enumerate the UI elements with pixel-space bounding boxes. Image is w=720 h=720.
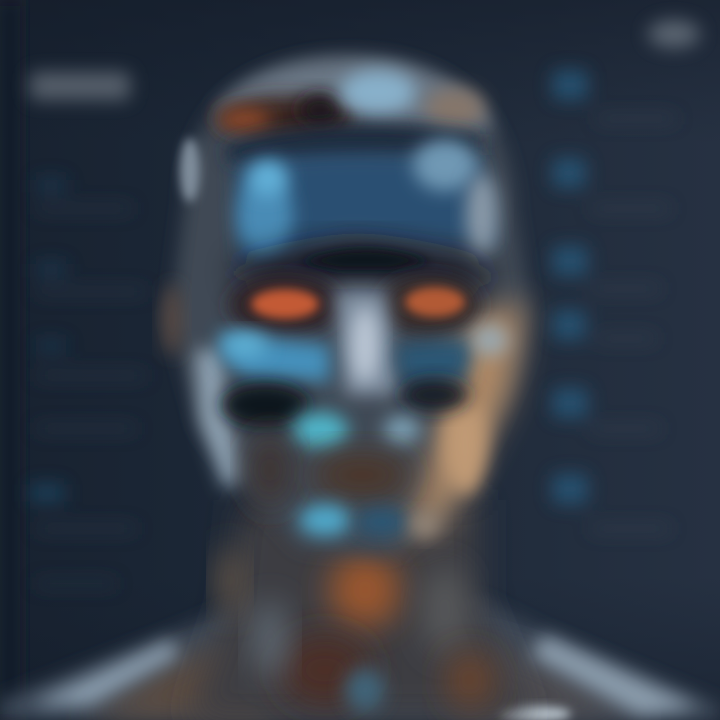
icon: top right badge xyxy=(648,20,700,48)
head: dark band above forehead xyxy=(225,125,480,165)
head: lower face browns xyxy=(312,453,412,497)
head: teal mouth tile xyxy=(292,412,348,448)
icon: right eye xyxy=(405,287,465,317)
head: top rim xyxy=(215,60,495,140)
panel: left text column xyxy=(30,72,146,587)
icon: left eye xyxy=(251,289,319,319)
head: blue forehead band xyxy=(235,153,495,262)
head: cyan cheek band left xyxy=(220,332,330,382)
head: cheek band right xyxy=(395,338,475,382)
panel: right text column xyxy=(552,20,700,532)
head: dark under cheek xyxy=(221,383,309,427)
head: dark hair top left with rust xyxy=(215,96,355,140)
head: dark brow xyxy=(235,244,490,290)
head: left side pale panel xyxy=(195,350,240,490)
heading: left panel title xyxy=(30,72,130,100)
head xyxy=(162,55,530,555)
shoulders xyxy=(0,600,720,720)
head: warm right cheek xyxy=(405,300,525,540)
head silhouette xyxy=(170,55,530,555)
head: nose bridge xyxy=(335,290,400,395)
neck xyxy=(190,500,530,720)
head: dark eye sockets xyxy=(229,275,341,335)
head: chin tiles xyxy=(299,504,351,536)
head: pale blue top patch xyxy=(340,70,416,114)
